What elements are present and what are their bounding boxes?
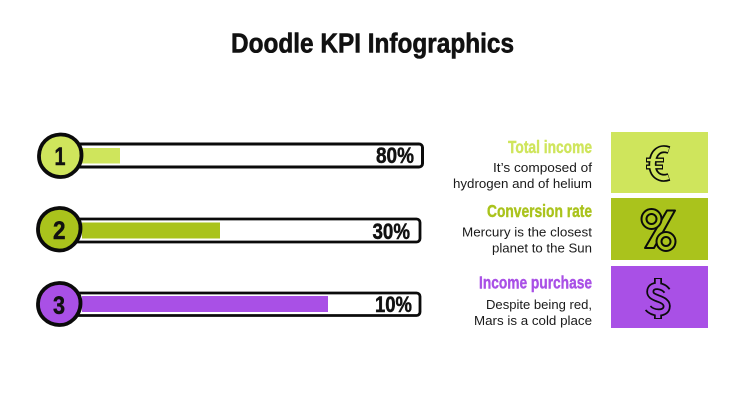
description line 1: Mercury is the closest (462, 224, 592, 240)
number 2: 2 (53, 217, 66, 245)
value 30%: 30% (372, 219, 410, 244)
bar fill 2 (82, 222, 220, 238)
description line 2: planet to the Sun (492, 240, 592, 256)
icon: percent (642, 209, 676, 251)
bar fill 3 (82, 296, 328, 312)
panel: percent tile (611, 198, 708, 260)
panel: euro tile (611, 132, 708, 193)
KPI bar 2 (38, 208, 420, 251)
value 80%: 80% (376, 143, 414, 168)
description line 1: It’s composed of (493, 160, 592, 175)
bar fill 1 (82, 148, 120, 164)
description line 2: Mars is a cold place (474, 313, 592, 328)
heading: total income: Total income (508, 137, 592, 157)
value 10%: 10% (375, 292, 412, 317)
description line 2: hydrogen and of helium (453, 176, 592, 191)
badge 2 (38, 208, 81, 251)
bar track 1 (70, 144, 422, 167)
KPI bar 3 (38, 283, 420, 325)
bar track 3 (70, 293, 420, 316)
panel: dollar tile (611, 266, 708, 328)
icon: dollar (648, 278, 668, 319)
KPI text: income purchase (474, 272, 592, 328)
heading: income purchase: Income purchase (479, 272, 592, 292)
badge 3 (38, 283, 81, 325)
KPI text: total income (453, 137, 592, 191)
KPI bar 1 (39, 134, 422, 177)
title: Doodle KPI Infographics (231, 28, 514, 58)
number 1: 1 (54, 143, 66, 171)
number 3: 3 (53, 292, 65, 320)
description line 1: Despite being red, (486, 297, 592, 312)
heading: conversion rate: Conversion rate (487, 201, 592, 221)
badge 1 (39, 134, 82, 177)
bar track 2 (70, 219, 420, 242)
KPI text: conversion rate (462, 201, 592, 256)
icon: euro (646, 149, 669, 178)
